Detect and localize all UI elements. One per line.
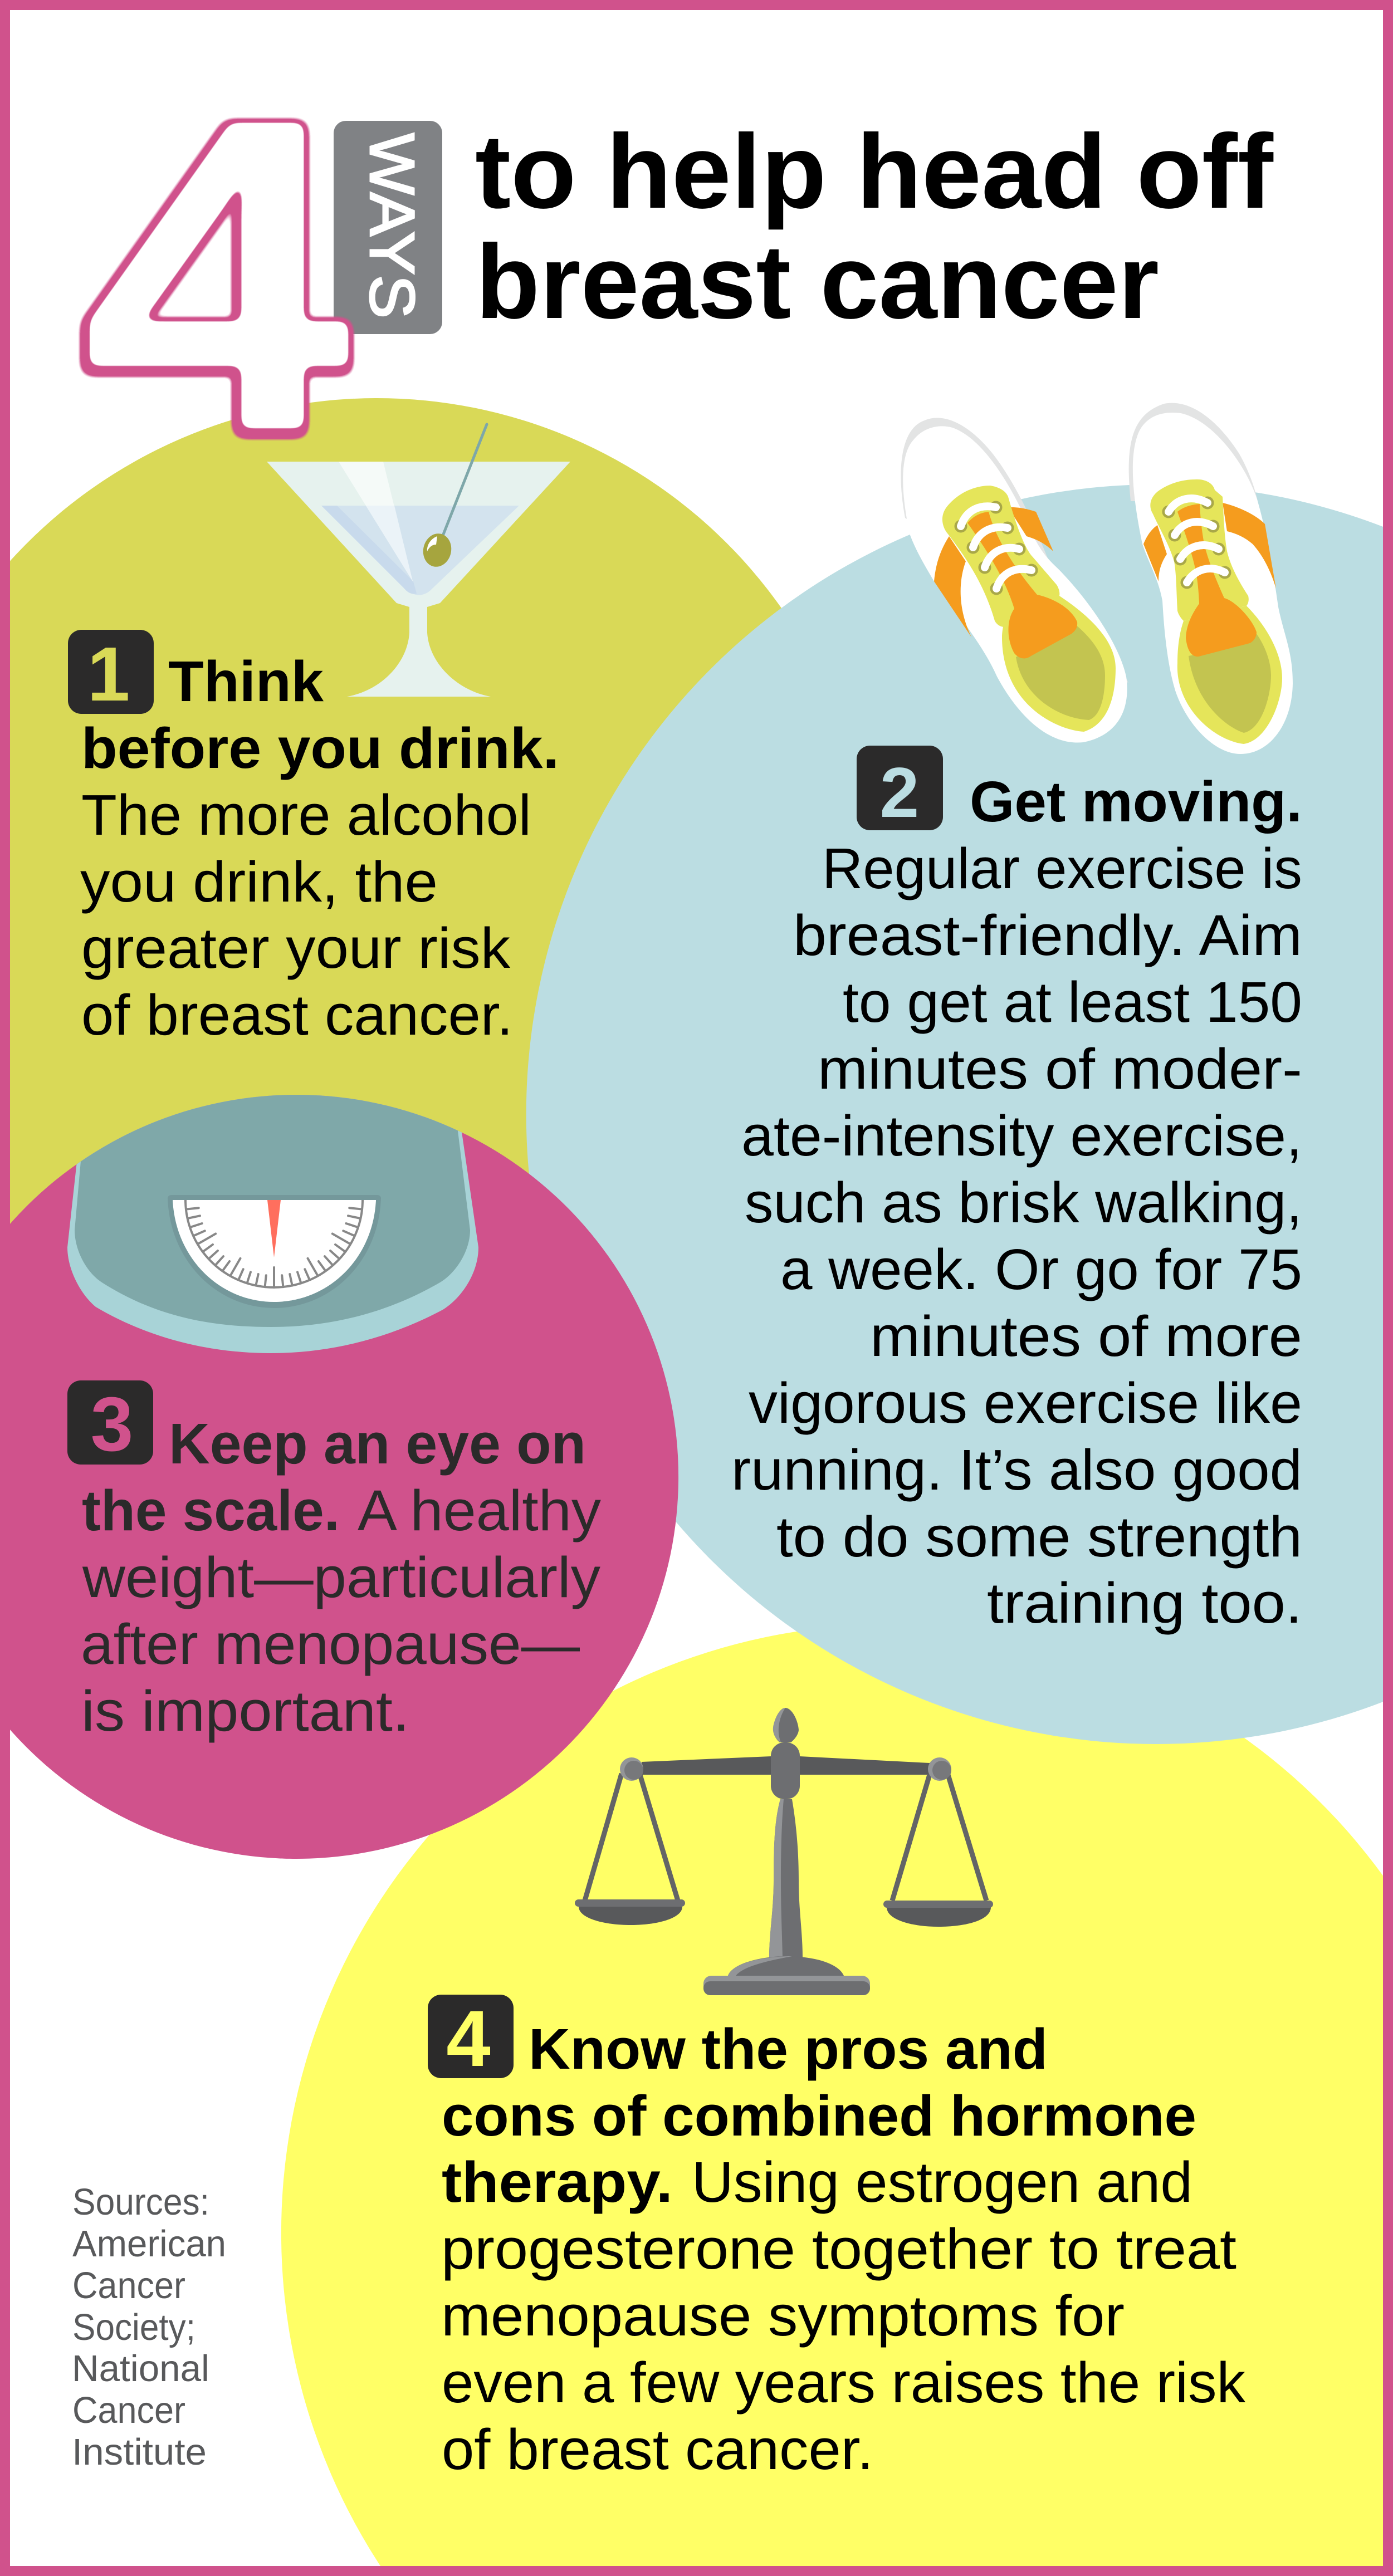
title: to help head off: [475, 113, 1274, 231]
panel text: tip 2: ate-intensity exercise,: [741, 1104, 1302, 1168]
badge 4: [428, 1995, 514, 2083]
panel text: tip 2: to get at least 150: [843, 970, 1302, 1034]
badge 3: [67, 1380, 153, 1467]
big numeral 4: 4: [82, 26, 354, 523]
badge 1: [68, 630, 154, 717]
circle: green panel: [0, 398, 872, 1387]
panel text: tip 4: Using estrogen and: [692, 2150, 1192, 2214]
panel text: tip 4: therapy.: [442, 2150, 673, 2214]
left shoe: [901, 418, 1128, 743]
panel text: tip 1: of breast cancer.: [81, 983, 513, 1047]
right shoe: [1129, 403, 1293, 754]
panel text: tip 1: Think: [168, 649, 324, 713]
sources note: Cancer: [72, 2265, 185, 2306]
panel text: tip 4: menopause symptoms for: [441, 2284, 1125, 2348]
panel text: tip 2: [731, 746, 1302, 1635]
panel text: tip 3: the scale.: [82, 1478, 340, 1542]
grey WAYS label: [334, 121, 442, 334]
sources note: American: [72, 2223, 226, 2265]
panel text: tip 4: [428, 1995, 1245, 2481]
panel text: tip 3: [67, 1380, 602, 1743]
panel text: tip 2: running. It’s also good: [731, 1438, 1302, 1502]
panel text: tip 1: greater your risk: [81, 916, 511, 980]
panel text: tip 4: of breast cancer.: [442, 2417, 873, 2481]
panel text: tip 3: Keep an eye on: [169, 1412, 586, 1476]
panel text: tip 2: minutes of more: [870, 1304, 1302, 1368]
badge 1: 1: [87, 631, 130, 717]
title: breast cancer: [476, 223, 1159, 341]
badge 2: [857, 746, 943, 832]
panel text: tip 2: Regular exercise is: [822, 836, 1302, 900]
icon: balance scales: [575, 1708, 993, 1995]
badge 2: 2: [880, 753, 919, 832]
circle: yellow panel: [281, 1624, 1393, 2576]
sources note: Sources:: [72, 2181, 209, 2223]
panel text: tip 1: [68, 630, 559, 1047]
panel text: tip 4: cons of combined hormone: [442, 2084, 1196, 2148]
sources note: Cancer: [72, 2389, 185, 2431]
badge 4: 4: [446, 1995, 491, 2083]
panel text: tip 2: minutes of moder-: [818, 1037, 1302, 1101]
sources note: [72, 2181, 226, 2473]
title: [475, 113, 1274, 341]
badge 3: 3: [91, 1382, 133, 1467]
sources note: Society;: [72, 2306, 195, 2348]
panel text: tip 2: vigorous exercise like: [749, 1371, 1302, 1435]
panel text: tip 3: A healthy: [358, 1478, 602, 1542]
panel text: tip 2: breast-friendly. Aim: [793, 903, 1302, 967]
panel text: tip 1: you drink, the: [80, 850, 438, 914]
panel text: tip 1: The more alcohol: [81, 783, 531, 847]
panel text: tip 2: Get moving.: [970, 770, 1302, 834]
circle: blue panel: [526, 484, 1393, 1744]
icon: bathroom scale: [67, 1086, 478, 1353]
panel text: tip 3: weight—particularly: [82, 1545, 601, 1609]
panel text: tip 3: is important.: [81, 1679, 409, 1743]
panel text: tip 4: even a few years raises the risk: [442, 2350, 1245, 2415]
sources note: National: [72, 2348, 209, 2389]
panel text: tip 1: before you drink.: [81, 716, 559, 780]
panel text: tip 2: training too.: [987, 1571, 1302, 1635]
icon: running shoes: [901, 403, 1293, 754]
panel text: tip 2: a week. Or go for 75: [780, 1237, 1302, 1301]
panel text: tip 2: such as brisk walking,: [745, 1171, 1302, 1235]
sources note: Institute: [72, 2431, 207, 2473]
panel text: tip 2: to do some strength: [776, 1505, 1302, 1569]
icon: martini glass: [267, 424, 570, 697]
panel text: tip 3: after menopause—: [81, 1612, 580, 1676]
circle: pink panel: [0, 1095, 678, 1859]
panel text: tip 4: Know the pros and: [529, 2017, 1048, 2081]
grey WAYS label: WAYS: [357, 133, 427, 319]
panel text: tip 4: progesterone together to treat: [441, 2217, 1236, 2281]
